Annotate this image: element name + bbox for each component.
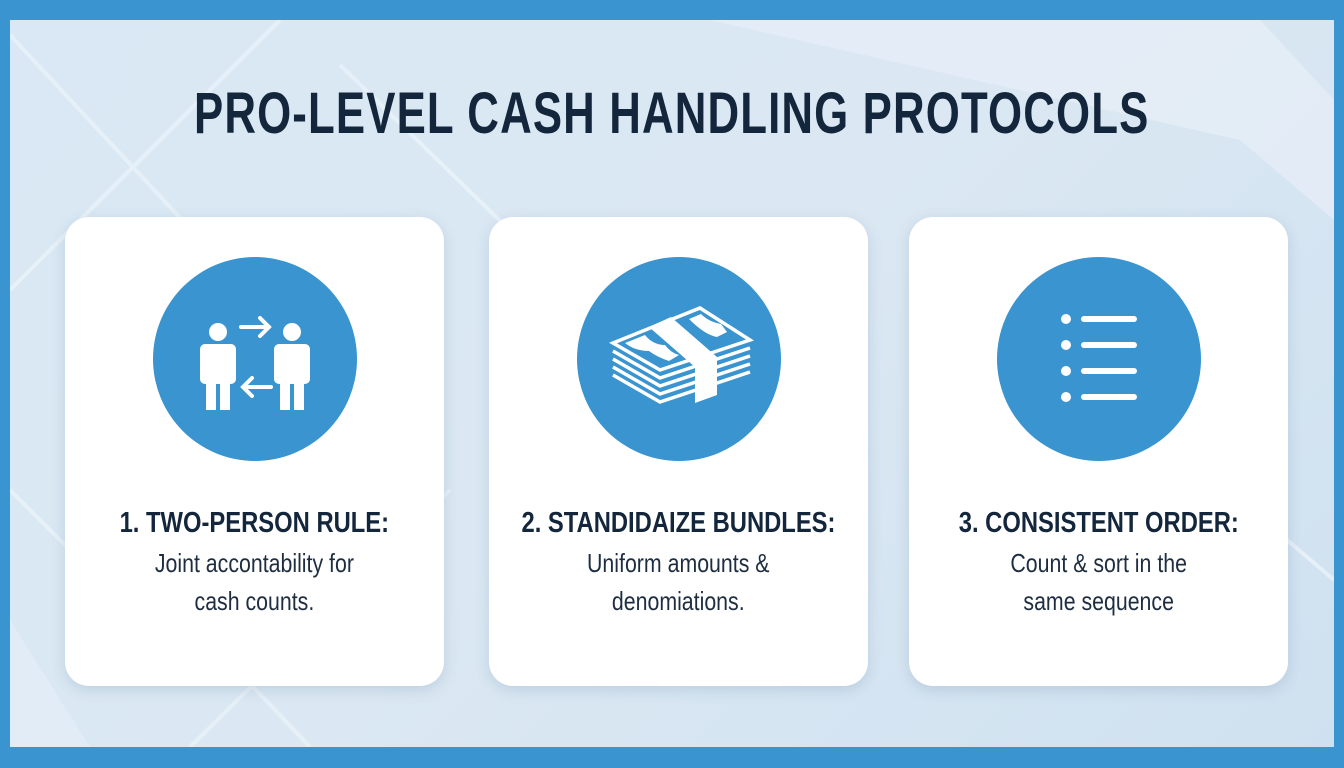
text: Uniform amounts & (587, 548, 770, 578)
icon: two people exchanging (153, 257, 357, 461)
text: Joint accontability for (155, 548, 354, 578)
icon: cash stack (577, 257, 781, 461)
text (1010, 548, 1187, 616)
heading: 2. STANDIDAIZE BUNDLES: (521, 507, 835, 539)
card 1: two-person rule (65, 217, 444, 686)
text (587, 548, 770, 616)
text: denomiations. (612, 586, 745, 616)
text: same sequence (1023, 586, 1174, 616)
title: PRO-LEVEL CASH HANDLING PROTOCOLS (194, 81, 1150, 146)
heading: 3. CONSISTENT ORDER: (958, 507, 1239, 539)
card 2: standardize bundles (489, 217, 868, 686)
heading: 1. TWO-PERSON RULE: (120, 507, 389, 539)
card 3: consistent order (909, 217, 1288, 686)
text (155, 548, 354, 616)
text: Count & sort in the (1010, 548, 1187, 578)
text: cash counts. (195, 586, 314, 616)
icon: list (997, 257, 1201, 461)
